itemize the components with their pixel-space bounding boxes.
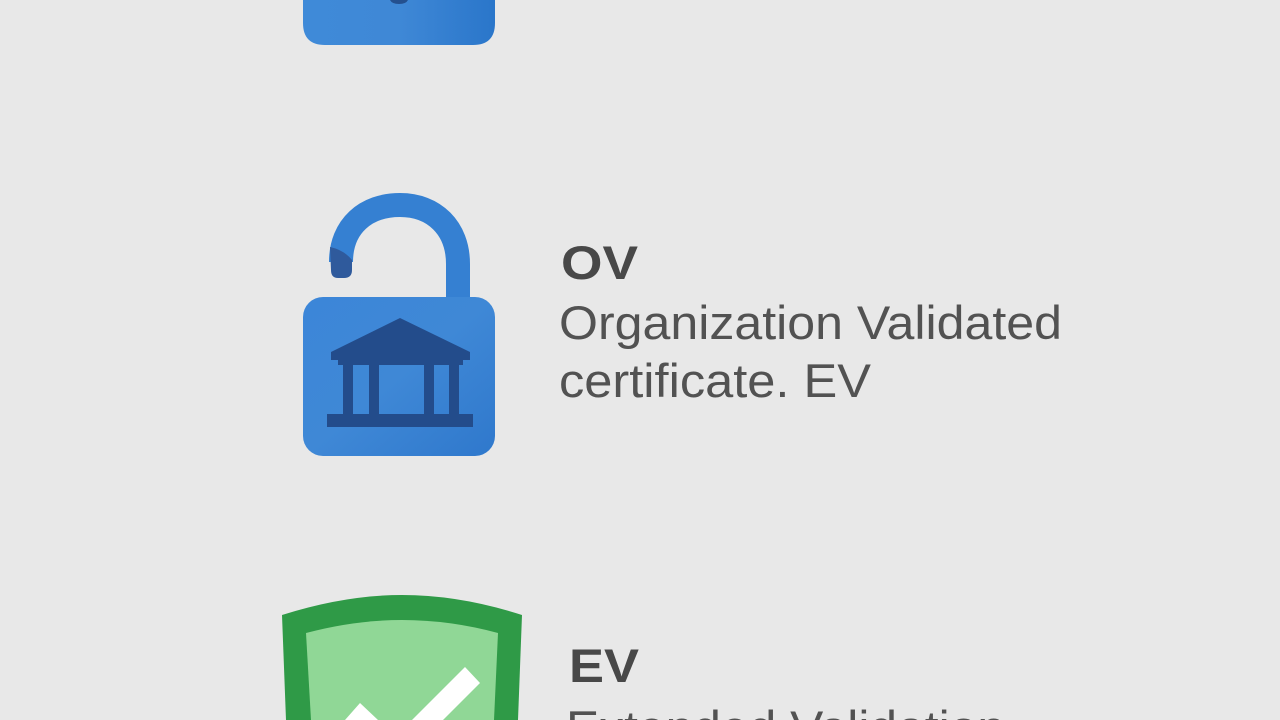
shield inner [306, 620, 498, 720]
check mark [345, 667, 480, 720]
keyhole remnant [390, 0, 408, 4]
shield outer [282, 595, 522, 720]
OV heading: OV [561, 236, 639, 289]
OV body line 1: Organization Validated [559, 296, 1062, 349]
text: EV description [566, 639, 1005, 720]
bank building [327, 318, 473, 427]
icon: green shield with check [282, 595, 522, 720]
padlock shackle [341, 205, 458, 298]
padlock body [303, 297, 495, 456]
icon: open padlock with bank building [303, 205, 495, 456]
icon: partial lock at top [303, 0, 495, 45]
EV heading: EV [569, 639, 640, 692]
text: OV description [559, 236, 1062, 407]
shackle end [330, 247, 352, 278]
OV body line 2: certificate. EV [559, 354, 872, 407]
